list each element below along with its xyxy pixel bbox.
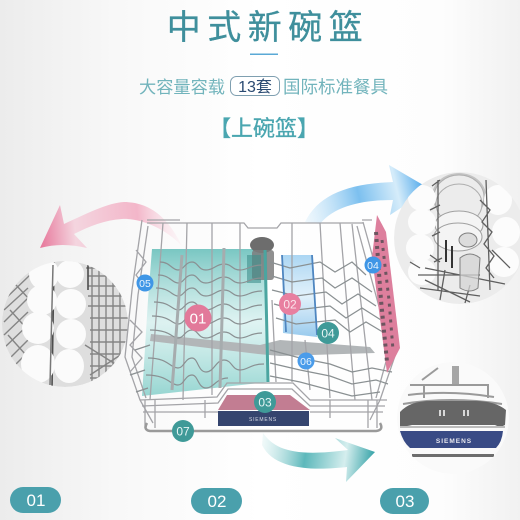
title underline [250,54,278,55]
detail circle: front label [400,366,506,457]
lower spray arm [150,334,375,356]
badge 02 [279,293,301,315]
plate tines [130,262,392,396]
panel: navy brand plate [400,431,503,448]
title: 中式新碗篮 [167,9,369,47]
dish basket [125,215,400,431]
section heading: 【 [209,116,231,141]
section heading [209,116,319,141]
detail circle: front label: SIEMENS [436,438,472,445]
teal plate rack highlight [142,249,268,396]
spray arm hub [247,237,274,283]
label pill 03: 03 [396,492,414,511]
label pill 02: 02 [208,492,226,511]
badge 06 [298,352,314,370]
badge 05 [136,274,154,292]
blue cup rack highlight [282,255,317,337]
badge 02: 02 [283,298,297,312]
badge 04 blue [364,256,382,274]
badge 01 [184,304,212,332]
arrow: blue to right detail [305,165,430,224]
label pill 03 [380,488,429,514]
badge 01: 01 [190,310,206,328]
subtitle: 13套 [238,78,272,96]
label pill 01 [10,487,61,513]
subtitle: 大容量容载 [139,77,225,97]
arrow: pink to left detail [40,202,182,248]
pink drawer [218,395,310,410]
panel: grey handle [400,401,506,426]
section heading: 】 [297,116,319,141]
detail circle: right plates and glasses [394,172,520,304]
badge 06: 06 [300,356,312,368]
badge 04 teal: 04 [321,326,335,340]
badge 03: 03 [258,396,272,410]
navy front plate [218,411,309,426]
plate rack spines [172,248,224,390]
badge 05: 05 [139,278,151,290]
detail circle: left plates [2,258,128,390]
subtitle [139,76,388,97]
basket pull bar [146,423,381,431]
label pill 02 [191,488,242,514]
arrow: teal to front detail [262,433,375,482]
cup rack spines [282,255,317,335]
basket wires [125,220,398,428]
badge 07: 07 [176,424,190,438]
subtitle: 国际标准餐具 [283,77,388,97]
brand text: SIEMENS [249,417,277,423]
badge 04 blue: 04 [367,260,379,272]
label pill 01: 01 [27,491,45,510]
section heading: 上碗篮 [231,116,297,141]
badge 03 [254,391,276,413]
badge 04 teal [317,322,339,344]
badge 07 [172,420,194,442]
pink side rack [372,215,400,373]
